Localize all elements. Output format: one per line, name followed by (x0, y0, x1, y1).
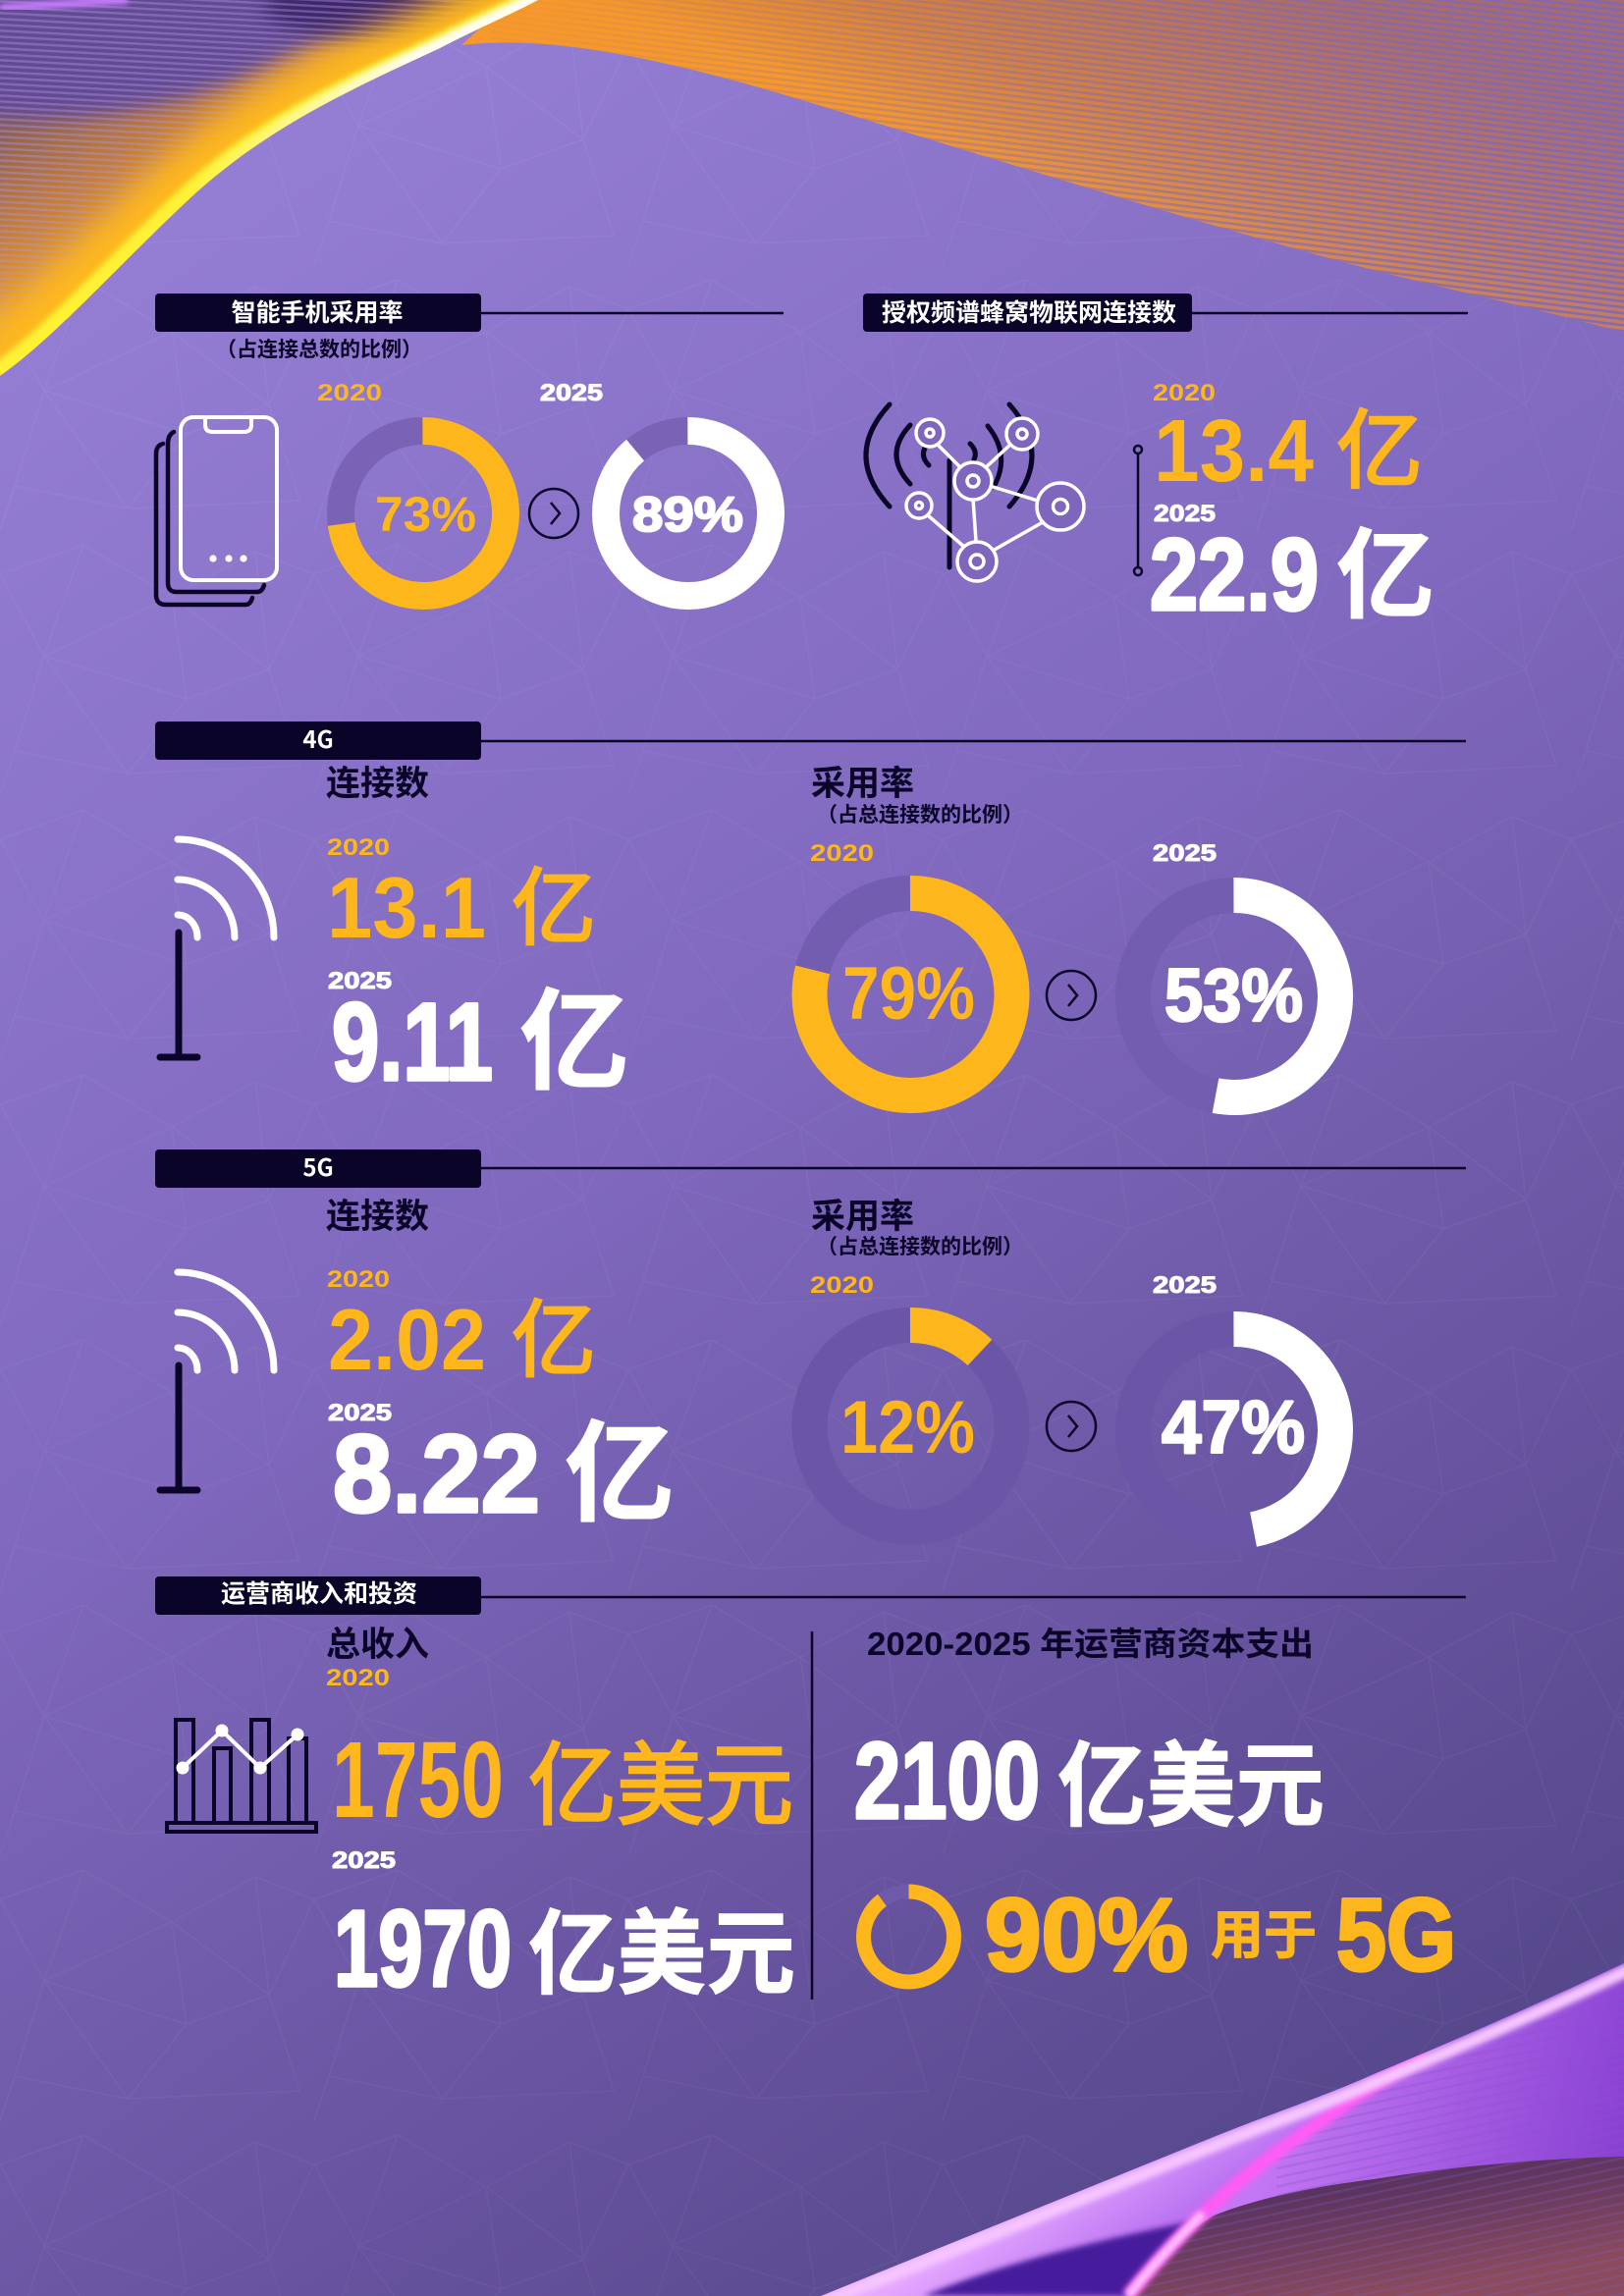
stat: 2020 4G connections: 13.1 (327, 859, 486, 956)
label: 2020: 2020 (810, 1272, 874, 1299)
vertical divider (811, 1631, 813, 2000)
section: 4G (155, 721, 1466, 1103)
donut: 12%: 12% (840, 1386, 975, 1469)
icon: 4G antenna (160, 839, 274, 1057)
stat: 2025 4G connections: 亿 (519, 981, 629, 1103)
heading bar: smartphone adoption (155, 294, 784, 332)
stat: 2020 revenue: 亿美元 (528, 1736, 793, 1837)
stat: capex total (854, 1721, 1325, 1842)
donut: 53%: 53% (1164, 954, 1303, 1038)
stat: 2025 4G connections: 9.11 (332, 981, 493, 1103)
arrow: 2020 to 2025 (1047, 1402, 1096, 1451)
heading bar: 4G (155, 721, 1466, 760)
stat: 2020 5G connections (327, 1266, 596, 1388)
section: 5G (155, 1148, 1466, 1535)
stat: 2025 4G connections: 2025 (328, 968, 392, 994)
arrow: 2020 to 2025 (1047, 971, 1096, 1020)
stat: 2025 revenue (334, 1889, 795, 2009)
heading bar: 5G (155, 1148, 1466, 1188)
stat: 2020 revenue (332, 1720, 793, 1841)
section: operator revenue and investment (155, 1576, 1466, 2009)
heading bar: 4G: 4G (302, 721, 334, 755)
stat: 2025 IoT connections: 2025 (1154, 501, 1216, 527)
stat: 2020 4G connections (327, 834, 596, 956)
stat: 2020 5G connections: 2.02 (328, 1291, 486, 1388)
stat: 2025 revenue: 亿美元 (528, 1902, 795, 2005)
heading: adoption: 采用率 (811, 765, 914, 803)
stat: 2025 IoT connections (1150, 501, 1435, 632)
stat: 2025 4G connections (328, 968, 629, 1103)
stat: 90% for 5G: 5G (1336, 1878, 1456, 1993)
label: 2020: 2020 (810, 840, 874, 867)
heading: connections: 连接数 (326, 1198, 429, 1236)
subtitle: share of total connections: （占总连接数的比例） (817, 804, 1023, 827)
donut: 79% (809, 893, 1011, 1095)
stat: 2025 5G connections: 8.22 (333, 1413, 540, 1535)
top left yellow wave (0, 0, 538, 376)
stat: 2025 5G connections (328, 1400, 675, 1535)
stat: 2020 4G connections: 亿 (512, 862, 596, 956)
heading: adoption: 采用率 (811, 1198, 914, 1236)
stat: 2020 4G connections: 2020 (327, 834, 390, 861)
donut: 73% (341, 431, 506, 596)
heading bar: smartphone adoption: 智能手机采用率 (231, 299, 404, 327)
label: 2025: 2025 (1153, 1272, 1217, 1299)
subtitle: share of total connections: （占连接总数的比例） (216, 339, 422, 361)
donut: 89% (606, 431, 771, 596)
heading: total revenue: 总收入 (326, 1626, 429, 1664)
donut: 53% (1133, 895, 1335, 1097)
stat: 2025 IoT connections: 22.9 (1150, 518, 1319, 632)
section: licensed cellular IoT connections (863, 294, 1468, 632)
icon: IoT network tower (866, 404, 1084, 581)
stat: 2020 5G connections: 2020 (327, 1266, 390, 1293)
bracket connector (1134, 446, 1142, 575)
stat: 2020 IoT connections: 13.4 (1154, 402, 1314, 501)
icon: bar chart with line (167, 1720, 316, 1832)
section: smartphone adoption (155, 294, 784, 605)
stat: capex total: 2100 (854, 1721, 1040, 1842)
heading: capex 2020-2025: 2020-2025 年运营商资本支出 (867, 1626, 1314, 1662)
heading bar: cellular IoT (863, 294, 1468, 332)
stat: 2025 IoT connections: 亿 (1336, 521, 1435, 631)
arrow: 2020 to 2025 (529, 489, 578, 538)
label: 2025: 2025 (1153, 840, 1217, 867)
heading: connections: 连接数 (326, 765, 429, 803)
donut: 47% (1133, 1329, 1335, 1531)
bottom right purple wave (815, 1953, 1624, 2296)
label: 2020: 2020 (326, 1665, 390, 1691)
stat: 90% for 5G (985, 1878, 1456, 1993)
icon: stacked smartphones (156, 417, 277, 605)
heading bar: 5G: 5G (302, 1148, 334, 1183)
stat: 2020 5G connections: 亿 (512, 1294, 596, 1388)
icon: 5G antenna (160, 1272, 274, 1490)
label: 2025: 2025 (332, 1847, 396, 1874)
label: 2020: 2020 (317, 380, 382, 406)
stat: 2020 revenue: 1750 (332, 1720, 504, 1841)
donut: 90% (864, 1892, 954, 1982)
donut: 47%: 47% (1162, 1386, 1305, 1469)
heading bar: operator revenue and investment (155, 1576, 1466, 1615)
stat: 2025 5G connections: 亿 (565, 1413, 675, 1535)
heading bar: cellular IoT: 授权频谱蜂窝物联网连接数 (882, 298, 1176, 327)
donut: 73%: 73% (375, 487, 476, 542)
donut: 79%: 79% (842, 952, 975, 1036)
stat: 2020 IoT connections (1153, 380, 1423, 501)
stat: 2020 IoT connections: 亿 (1336, 402, 1423, 500)
stat: 90% for 5G: 90% (985, 1878, 1188, 1993)
subtitle: share of total connections: （占总连接数的比例） (817, 1236, 1023, 1258)
stat: 90% for 5G: 用于 (1211, 1906, 1317, 1965)
heading bar: operator revenue and investment: 运营商收入和投资 (221, 1580, 417, 1608)
donut: 12% (809, 1325, 1011, 1527)
stat: 2025 5G connections: 2025 (328, 1400, 392, 1426)
stat: 2020 IoT connections: 2020 (1153, 380, 1216, 406)
donut: 89%: 89% (632, 487, 743, 542)
stat: capex total: 亿美元 (1057, 1735, 1325, 1838)
stat: 2025 revenue: 1970 (334, 1889, 512, 2009)
label: 2025: 2025 (540, 380, 603, 406)
top right orange wave (461, 0, 1624, 333)
